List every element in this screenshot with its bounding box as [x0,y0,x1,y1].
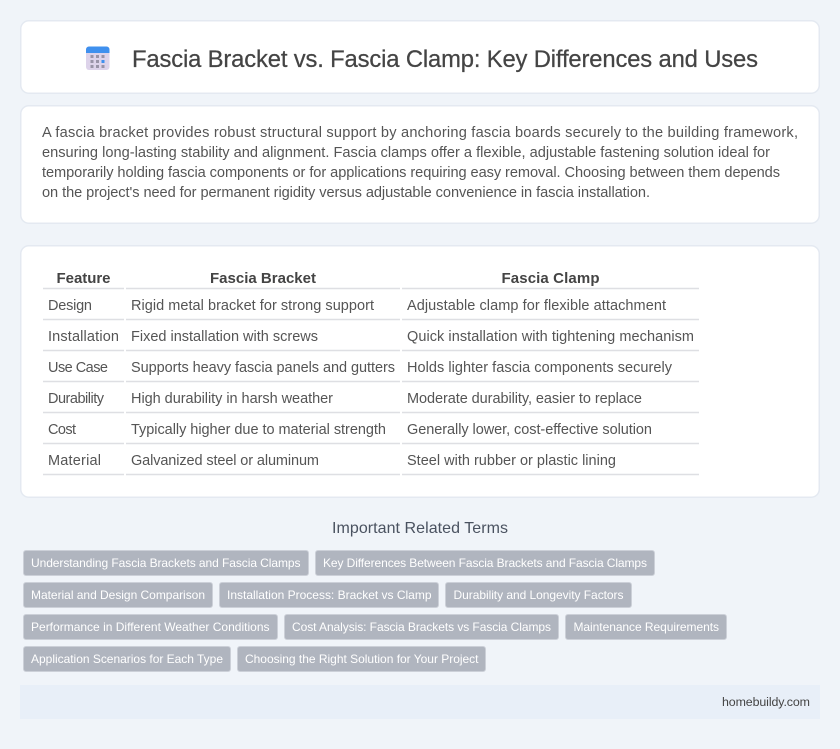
table row: cost: Generally lower, cost-effective solution [407,422,652,438]
table header: Fascia Clamp [502,270,600,287]
tag: Understanding Fascia Brackets and Fascia Clamps [31,556,300,570]
table header [56,270,600,287]
tag [24,614,278,640]
tag: Performance in Different Weather Conditions [31,620,270,634]
panel: comparison table [21,246,819,497]
table row: design: Adjustable clamp for flexible attachment [407,298,666,314]
text block: introduction paragraph: on the project's need for permanent rigidity versus adjustable convenience in fascia installation. [42,185,650,201]
table row: durability [48,391,642,407]
tag [238,646,486,672]
text block: introduction paragraph [42,125,798,201]
table row: durability: High durability in harsh weather [131,391,333,407]
tag [284,614,558,640]
tag [316,550,654,576]
table row: cost: Typically higher due to material strength [131,422,386,438]
table row: installation: Quick installation with tightening mechanism [407,329,694,345]
title: Fascia Bracket vs. Fascia Clamp: Key Differences and Uses [132,46,758,73]
table header: Feature [56,270,110,287]
tag [220,582,438,608]
table row: installation: Fixed installation with screws [131,329,318,345]
text block: introduction paragraph: ensuring long-lasting stability and alignment. Fascia clamps offer a flexible, adjustable fastening solution ideal for [42,145,770,161]
table row: material: Material [48,453,101,469]
table row: use case: Holds lighter fascia components securely [407,360,673,376]
tag: Installation Process: Bracket vs Clamp [227,588,432,602]
text block: introduction paragraph: temporarily holding fascia components or for applications requiring easy removal. Choosing between them depends [42,165,780,181]
tag: Maintenance Requirements [574,620,719,634]
table row: material: Steel with rubber or plastic lining [407,453,616,469]
panel: introduction [21,106,819,223]
tag [566,614,726,640]
table row: cost [48,422,652,438]
table row: design: Design [48,298,92,314]
table row: material: Galvanized steel or aluminum [131,453,319,469]
table row: use case: Use Case [48,360,108,376]
table header: Fascia Bracket [210,270,316,287]
table row: use case: Supports heavy fascia panels and gutters [131,360,395,376]
related term tags [24,550,726,672]
table row: installation [48,329,694,345]
tag [24,582,212,608]
tag: Application Scenarios for Each Type [31,652,223,666]
table row: design [48,298,666,314]
text block: introduction paragraph: A fascia bracket provides robust structural support by anchoring fascia boards securely to the building framework, [42,125,798,141]
tag: Choosing the Right Solution for Your Project [245,652,479,666]
panel: title card [21,21,819,93]
tag [24,646,230,672]
table row: durability: Moderate durability, easier to replace [407,391,642,407]
icon: calendar [86,46,110,70]
tag [446,582,632,608]
table row: durability: Durability [48,391,105,407]
tag [24,550,308,576]
table row: material [48,453,616,469]
table row: design: Rigid metal bracket for strong support [131,298,374,314]
table row: cost: Cost [48,422,76,438]
heading: important related terms: Important Related Terms [332,520,508,537]
tag: Cost Analysis: Fascia Brackets vs Fascia Clamps [292,620,551,634]
table row: use case [48,360,673,376]
tag: Key Differences Between Fascia Brackets and Fascia Clamps [323,556,647,570]
footer source text: homebuildy.com [722,695,810,709]
tag: Material and Design Comparison [31,588,205,602]
tag: Durability and Longevity Factors [454,588,624,602]
table row: installation: Installation [48,329,119,345]
footer bar [20,685,820,719]
